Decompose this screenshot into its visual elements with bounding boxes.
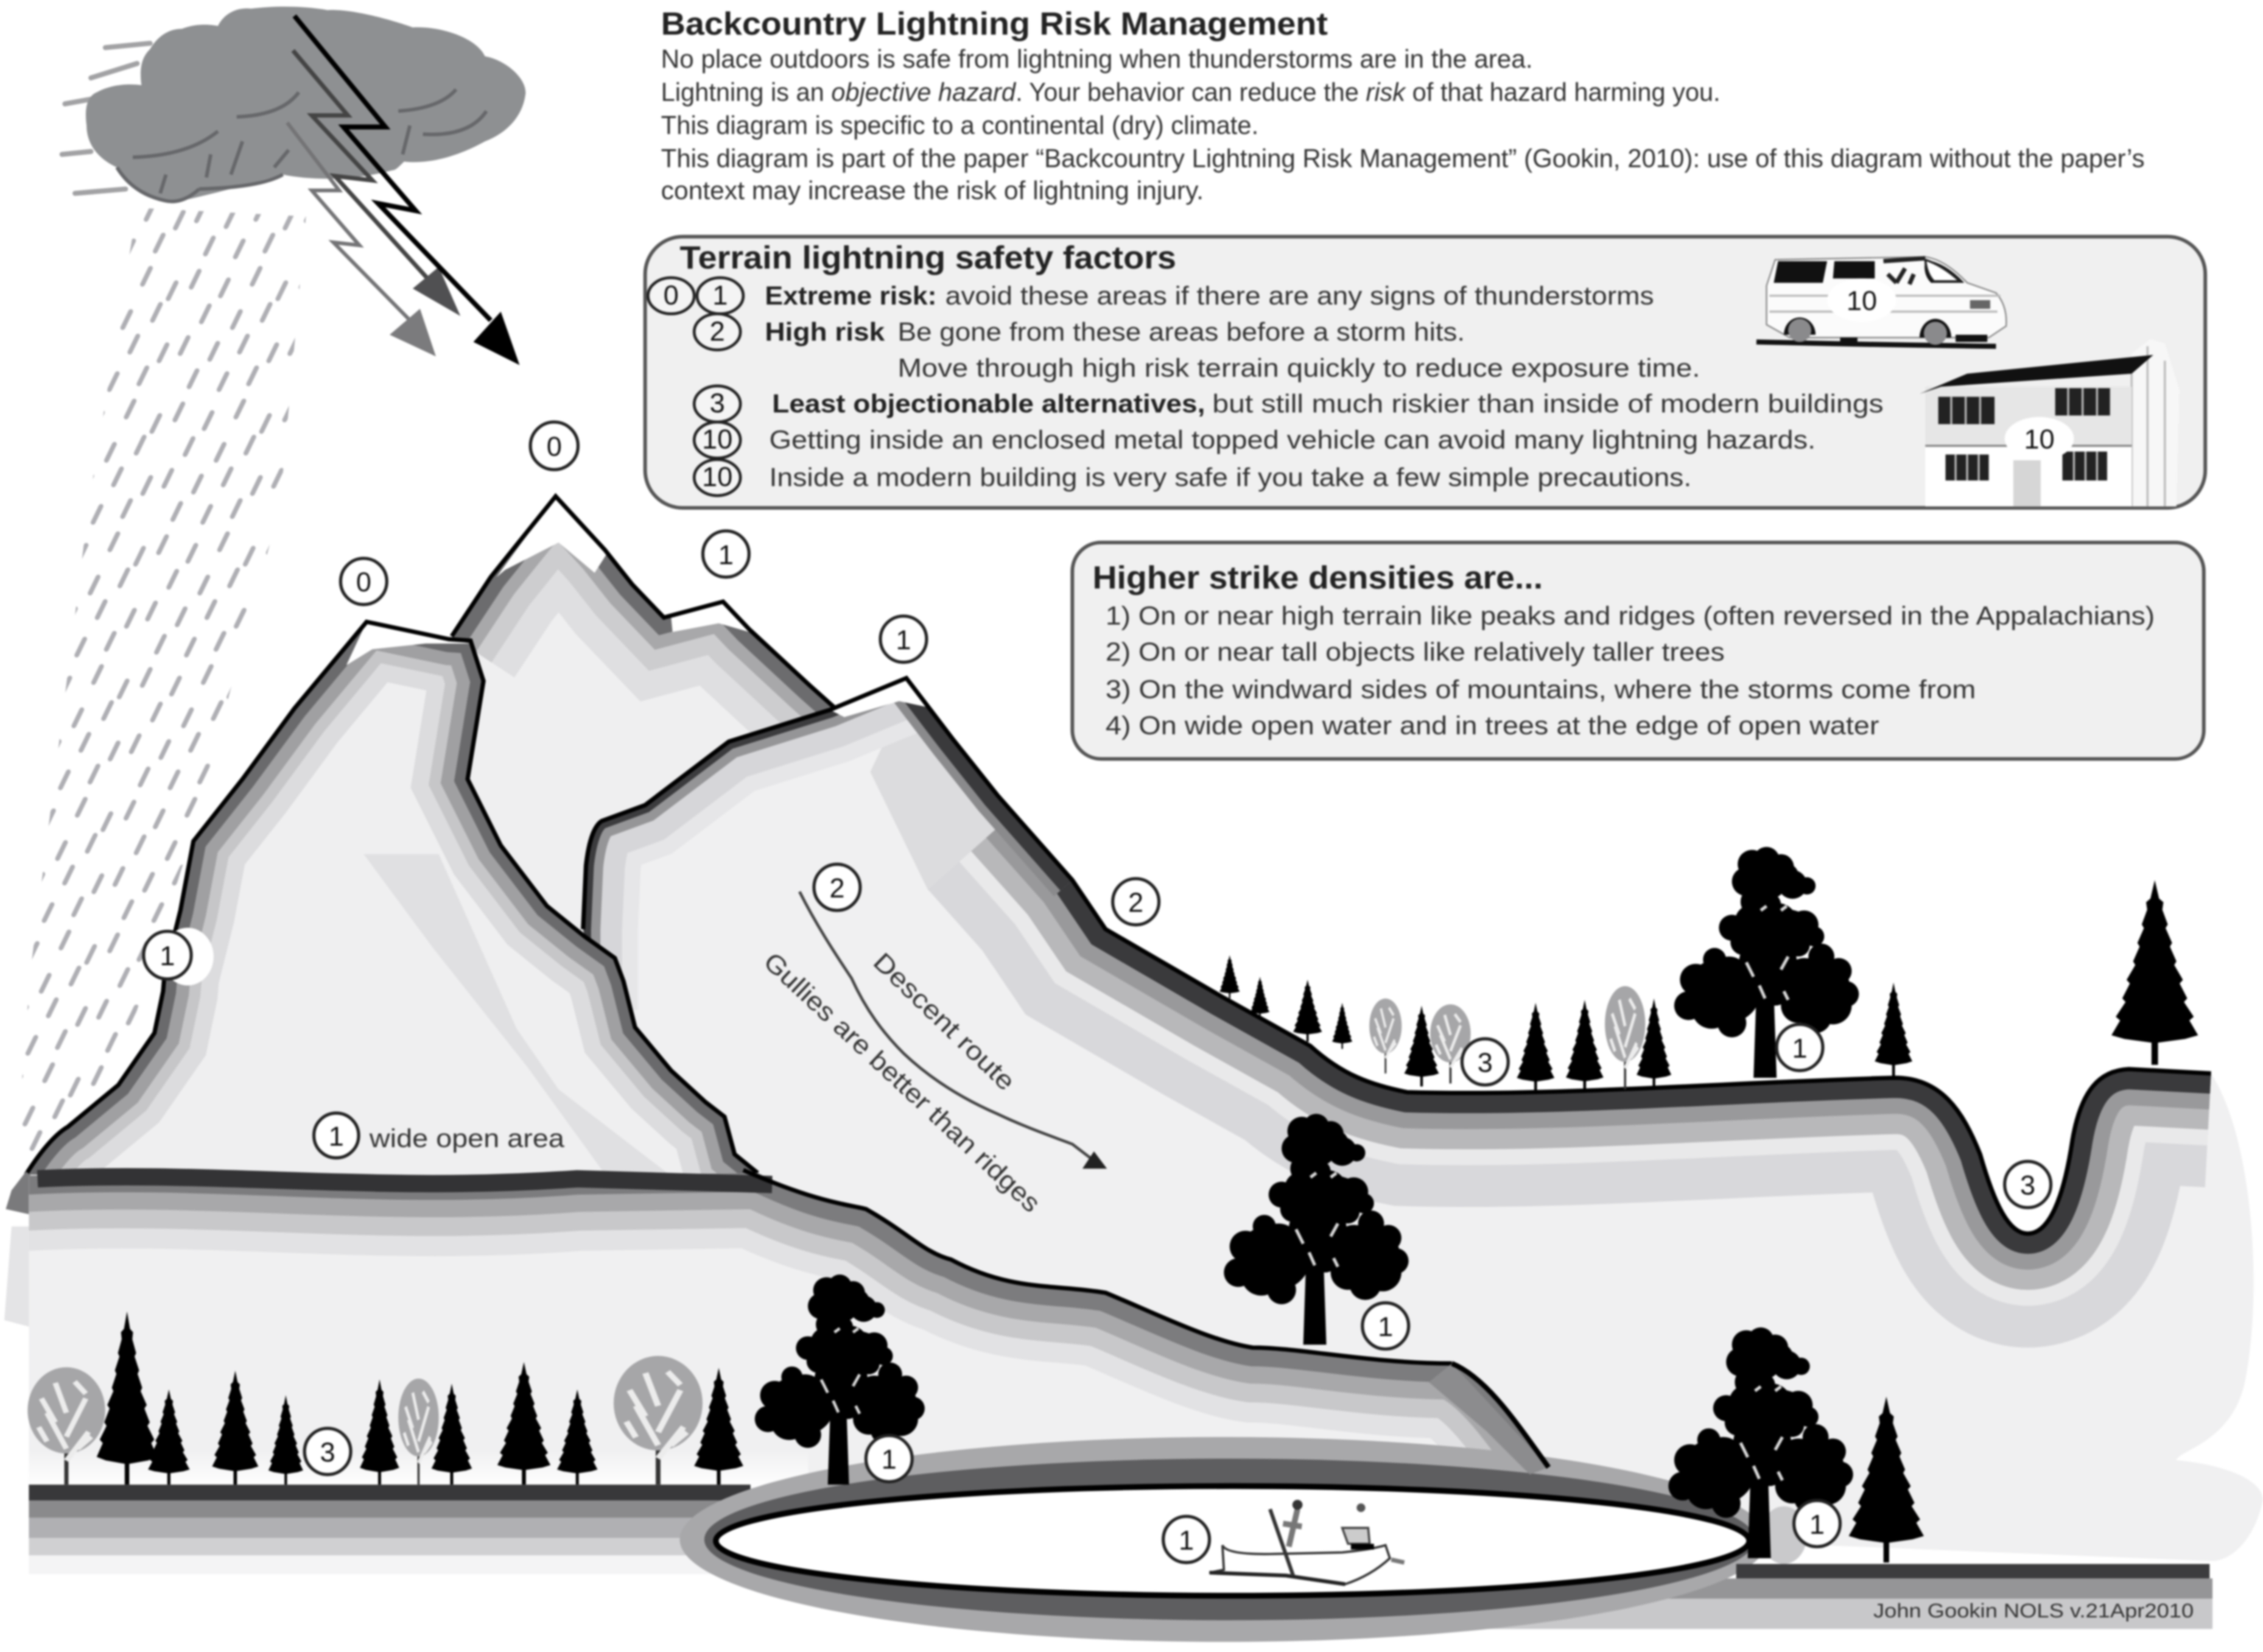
intro text: This diagram is specific to a continental (dry) climate. xyxy=(661,111,1258,140)
marker 1 back summit: 1 xyxy=(718,539,734,570)
heading: terrain factors: Terrain lightning safety factors xyxy=(680,240,1176,275)
row: high risk: Be gone from these areas before a storm hits. xyxy=(898,317,1465,346)
marker 0 left peak: 0 xyxy=(356,566,371,597)
list: strike density items: 4) On wide open water and in trees at the edge of open water xyxy=(1106,711,1879,740)
row: high risk: 2 xyxy=(709,315,725,346)
marker 1 ridge oak xyxy=(1777,1024,1822,1071)
row: extreme risk: 1 xyxy=(712,279,728,310)
marker 1 ridge summit: 1 xyxy=(896,625,911,655)
row: building xyxy=(694,460,1691,496)
panel: terrain lightning safety factors xyxy=(645,236,2206,508)
terrain: left mountain xyxy=(24,618,760,1176)
panel: higher strike densities xyxy=(1073,543,2204,759)
row: least objectionable alternatives: 3 xyxy=(709,387,725,418)
lake xyxy=(680,1437,1768,1642)
row: high risk: High risk xyxy=(765,317,885,346)
icon: house: 10 xyxy=(2024,423,2055,454)
icon: vehicle xyxy=(1756,257,2006,346)
tree: oak on foothill xyxy=(1224,1114,1408,1345)
terrain: right ground xyxy=(1736,1564,2210,1578)
marker 1 right shore oak xyxy=(1794,1500,1840,1547)
row: building: 10 xyxy=(702,461,732,492)
marker 3 valley xyxy=(2004,1161,2051,1208)
marker 1 cliff xyxy=(144,932,192,979)
terrain label: wide open area xyxy=(314,1113,564,1158)
tree: oak by right shore xyxy=(1669,1327,1853,1558)
terrain: main mountain and right ridge xyxy=(548,635,2263,1587)
credit: John Gookin NOLS v.21Apr2010 xyxy=(1873,1600,2194,1622)
intro text: context may increase the risk of lightning injury. xyxy=(661,176,1204,205)
terrain label: wide open area: 1 xyxy=(329,1120,344,1151)
marker 0 main peak: 0 xyxy=(547,431,562,462)
tree: oak by left shore xyxy=(755,1275,925,1485)
intro text: No place outdoors is safe from lightning when thunderstorms are in the area. xyxy=(661,45,1533,74)
row: vehicle: 10 xyxy=(702,423,732,454)
row: vehicle: Getting inside an enclosed metal topped vehicle can avoid many lightning hazards. xyxy=(769,426,1816,454)
intro text: Lightning is an objective hazard. Your behavior can reduce the risk of that hazard harming you. xyxy=(661,78,1720,107)
terrain: left ground bands xyxy=(29,1485,751,1574)
marker 1 ridge summit xyxy=(880,616,927,662)
marker 3 left forest: 3 xyxy=(320,1436,335,1467)
heading: higher strike densities: Higher strike densities are... xyxy=(1092,560,1543,596)
row: extreme risk: Extreme risk: xyxy=(765,281,937,310)
icon: vehicle: 10 xyxy=(1847,285,1877,316)
row: vehicle xyxy=(694,422,1816,458)
foothill tail xyxy=(1429,1363,1548,1475)
marker 1 back summit xyxy=(703,531,749,577)
terrain: back mountain xyxy=(449,492,836,932)
tree: conifer by right shore xyxy=(1849,1396,1924,1563)
row: extreme risk xyxy=(648,278,1654,314)
row: high risk: Move through high risk terrain quickly to reduce exposure time. xyxy=(898,354,1700,382)
marker 1 cliff: 1 xyxy=(160,941,175,971)
marker 1 foothill oak: 1 xyxy=(1378,1311,1393,1342)
rain xyxy=(16,208,306,1160)
icon: house xyxy=(1920,339,2179,507)
marker 1 left shore oak xyxy=(866,1435,912,1482)
marker 3 left forest xyxy=(304,1428,351,1475)
route label: descent route xyxy=(799,892,1107,1169)
title: Backcountry Lightning Risk Management xyxy=(661,7,1327,42)
icon: canoe with paddlers xyxy=(1210,1500,1404,1584)
lightning bolt: black xyxy=(295,16,519,365)
trees: ridge forest xyxy=(1220,880,2198,1092)
tree: oak on ridge xyxy=(1674,847,1859,1078)
intro text xyxy=(661,45,2144,205)
intro text: This diagram is part of the paper “Backcountry Lightning Risk Management” (Gookin, 2010): use of this diagram without the paper’s xyxy=(661,144,2144,173)
marker 0 main peak xyxy=(530,422,578,470)
list: strike density items: 3) On the windward sides of mountains, where the storms come from xyxy=(1106,675,1976,704)
icon: lightning bolts xyxy=(287,16,519,365)
list: strike density items: 2) On or near tall objects like relatively taller trees xyxy=(1106,638,1725,667)
marker 1 left shore oak: 1 xyxy=(882,1444,897,1475)
row: least objectionable alternatives: Least objectionable alternatives, xyxy=(772,390,1205,418)
terrain: right ground under bands xyxy=(1443,1578,2212,1629)
rock at lake edge xyxy=(1761,1506,1807,1564)
marker 1 foothill oak xyxy=(1362,1303,1408,1349)
terrain label: wide open area: wide open area xyxy=(368,1124,564,1153)
marker 1 right shore oak: 1 xyxy=(1809,1508,1825,1539)
route label: descent route: Descent route xyxy=(868,947,1020,1097)
row: least objectionable alternatives: but still much riskier than inside of modern buildings xyxy=(1213,390,1884,418)
marker 1 ridge oak: 1 xyxy=(1792,1033,1807,1064)
row: building: Inside a modern building is very safe if you take a few simple precautions. xyxy=(769,463,1691,492)
marker 2 ridge: 2 xyxy=(1129,887,1143,918)
risk markers xyxy=(144,422,2051,1563)
list: strike density items xyxy=(1106,602,2155,740)
terrain: foothill and left slope xyxy=(4,1167,1534,1488)
marker 3 valley: 3 xyxy=(2020,1170,2035,1201)
marker 2 ridge xyxy=(1113,879,1159,925)
lightning bolt: grey xyxy=(287,123,436,356)
marker 3 ridge forest: 3 xyxy=(1478,1047,1492,1078)
icon: storm cloud xyxy=(62,7,526,202)
trees: left forest xyxy=(27,1312,743,1485)
route label: gullies are better than ridges: Gullies are better than ridges xyxy=(758,947,1046,1218)
row: high risk xyxy=(694,314,1700,382)
marker 0 left peak xyxy=(340,558,387,605)
marker 2 gully xyxy=(814,864,860,910)
marker 3 ridge forest xyxy=(1462,1038,1508,1085)
lightning bolt: dark xyxy=(293,51,460,316)
row: least objectionable alternatives xyxy=(694,386,1884,422)
list: strike density items: 1) On or near high terrain like peaks and ridges (often reversed in the Appalachians) xyxy=(1106,602,2155,630)
marker 1 lake: 1 xyxy=(1179,1525,1194,1556)
row: extreme risk: avoid these areas if there are any signs of thunderstorms xyxy=(945,281,1654,310)
marker 1 lake xyxy=(1163,1516,1210,1563)
marker 2 gully: 2 xyxy=(829,872,845,903)
cliff hollow xyxy=(161,928,214,985)
row: extreme risk: 0 xyxy=(664,279,678,310)
